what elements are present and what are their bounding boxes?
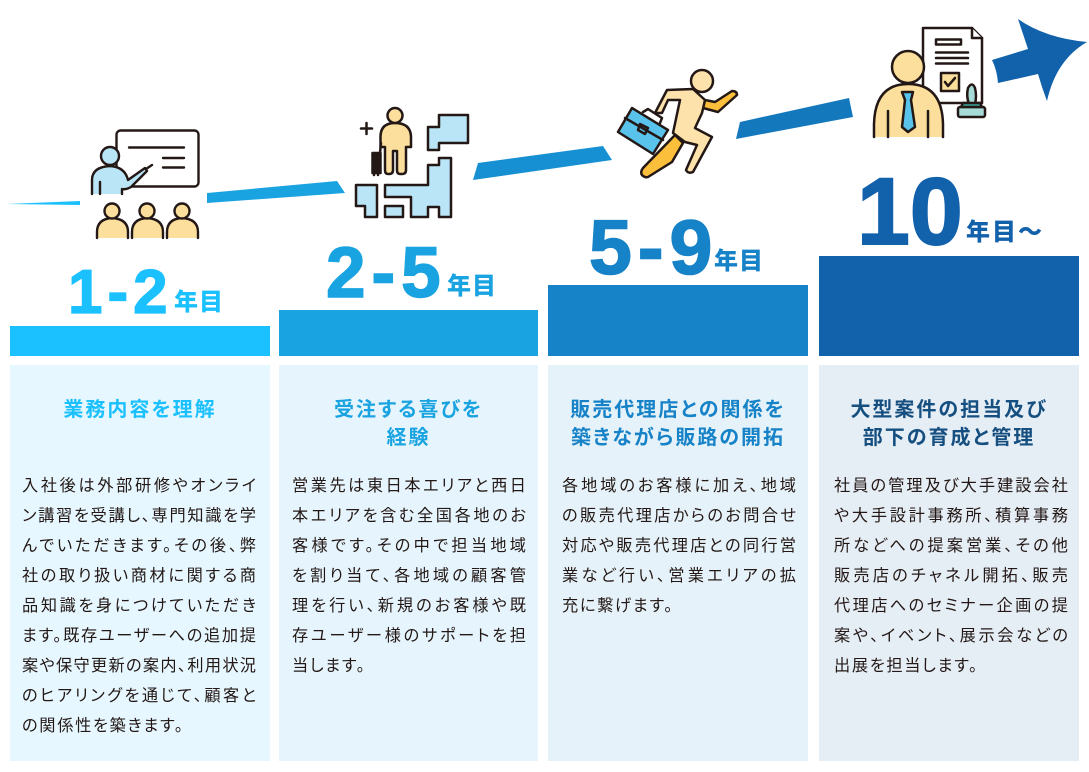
arrow head xyxy=(992,19,1087,101)
icon: presenter with audience xyxy=(92,130,198,238)
text: 1-2 years: のヒアリングを通じて、顧客と xyxy=(22,682,256,706)
text: 2-5 years: 当します。 xyxy=(292,652,366,676)
text: 2-5 years: 存ユーザー様のサポートを担 xyxy=(292,622,526,646)
text: 1-2 years: の関係性を築きます。 xyxy=(22,712,184,736)
text: 5-9 years: 充に繋げます。 xyxy=(562,592,674,616)
icon: manager with document and stamp xyxy=(874,28,985,137)
text: 10+ years: 代理店へのセミナー企画の提 xyxy=(834,592,1068,616)
text: 2-5 years: 客様です。その中で担当地域 xyxy=(292,532,526,556)
heading: 10+ years xyxy=(850,393,1048,450)
text: 5-9 years: 各地域のお客様に加え、地域 xyxy=(562,472,796,496)
text: 10+ years: 所などへの提案営業、その他 xyxy=(834,532,1068,556)
years label: 1-2: 1-2 xyxy=(68,258,173,327)
text: 10+ years xyxy=(834,472,1068,676)
text: 2-5 years: 理を行い、新規のお客様や既 xyxy=(292,592,526,616)
text: 1-2 years: 入社後は外部研修やオンライ xyxy=(22,472,256,496)
heading: 10+ years: 大型案件の担当及び xyxy=(850,393,1048,422)
text: 1-2 years: 社の取り扱い商材に関する商 xyxy=(22,562,256,586)
text: 2-5 years xyxy=(292,472,526,676)
icon: running businessperson with briefcase xyxy=(618,70,737,177)
text: 2-5 years: 本エリアを含む全国各地のお xyxy=(292,502,526,526)
text: 5-9 years xyxy=(562,472,796,616)
text: 10+ years: 案や、イベント、展示会などの xyxy=(834,622,1068,646)
heading: 2-5 years: 受注する喜びを xyxy=(334,393,483,422)
text: 10+ years: 販売店のチャネル開拓、販売 xyxy=(834,562,1068,586)
icon: traveller and map of Japan xyxy=(356,108,468,217)
bar: 5-9 years xyxy=(548,285,808,356)
text: 1-2 years: 案や保守更新の案内、利用状況 xyxy=(22,652,256,676)
arrow segment 3 xyxy=(473,146,612,180)
panel: 5-9 years xyxy=(548,365,808,761)
text: 2-5 years: を割り当て、各地域の顧客管 xyxy=(292,562,526,586)
years label: 10: 年目～ xyxy=(966,212,1044,247)
years label: 5-9: 年目 xyxy=(714,241,764,276)
heading: 1-2 years: 業務内容を理解 xyxy=(63,393,217,422)
panel: 10+ years xyxy=(819,365,1079,761)
text: 5-9 years: 対応や販売代理店との同行営 xyxy=(562,532,796,556)
years label: 1-2 xyxy=(68,258,224,327)
panel: 2-5 years xyxy=(279,365,538,761)
bar: 1-2 years xyxy=(10,326,270,356)
text: 5-9 years: の販売代理店からのお問合せ xyxy=(562,502,796,526)
arrow segment 4 xyxy=(736,98,853,139)
years label: 1-2: 年目 xyxy=(174,282,224,317)
text: 1-2 years: ン講習を受講し、専門知識を学 xyxy=(22,502,256,526)
text: 2-5 years: 営業先は東日本エリアと西日 xyxy=(292,472,526,496)
heading: 5-9 years xyxy=(570,393,786,450)
text: 10+ years: 社員の管理及び大手建設会社 xyxy=(834,472,1068,496)
panel: 1-2 years xyxy=(10,365,270,761)
years label: 10: 10 xyxy=(857,159,963,265)
text: 10+ years: 出展を担当します。 xyxy=(834,652,979,676)
text: 1-2 years: 品知識を身につけていただき xyxy=(22,592,256,616)
bar: 2-5 years xyxy=(279,310,538,356)
bar: 10+ years xyxy=(819,256,1079,356)
text: 5-9 years: 業など行い、営業エリアの拡 xyxy=(562,562,796,586)
years label: 2-5: 2-5 xyxy=(326,234,447,313)
years label: 2-5: 年目 xyxy=(447,266,497,301)
heading: 2-5 years: 経験 xyxy=(386,421,430,450)
career steps graphic: icons, arrow, years and bars xyxy=(8,19,1087,356)
arrow segment 2 xyxy=(207,181,345,203)
text: 1-2 years: ます。既存ユーザーへの追加提 xyxy=(22,622,256,646)
years label: 10 xyxy=(857,159,1044,265)
heading: 5-9 years: 築きながら販路の開拓 xyxy=(571,421,785,450)
heading: 10+ years: 部下の育成と管理 xyxy=(863,421,1035,450)
text: 10+ years: や大手設計事務所、積算事務 xyxy=(834,502,1068,526)
text: 1-2 years: んでいただきます。その後、弊 xyxy=(22,532,256,556)
text: 1-2 years xyxy=(22,472,256,736)
arrow segment 1 xyxy=(7,201,80,205)
heading: 5-9 years: 販売代理店との関係を xyxy=(570,393,786,422)
heading: 2-5 years xyxy=(334,393,483,450)
years label: 5-9: 5-9 xyxy=(589,205,718,291)
